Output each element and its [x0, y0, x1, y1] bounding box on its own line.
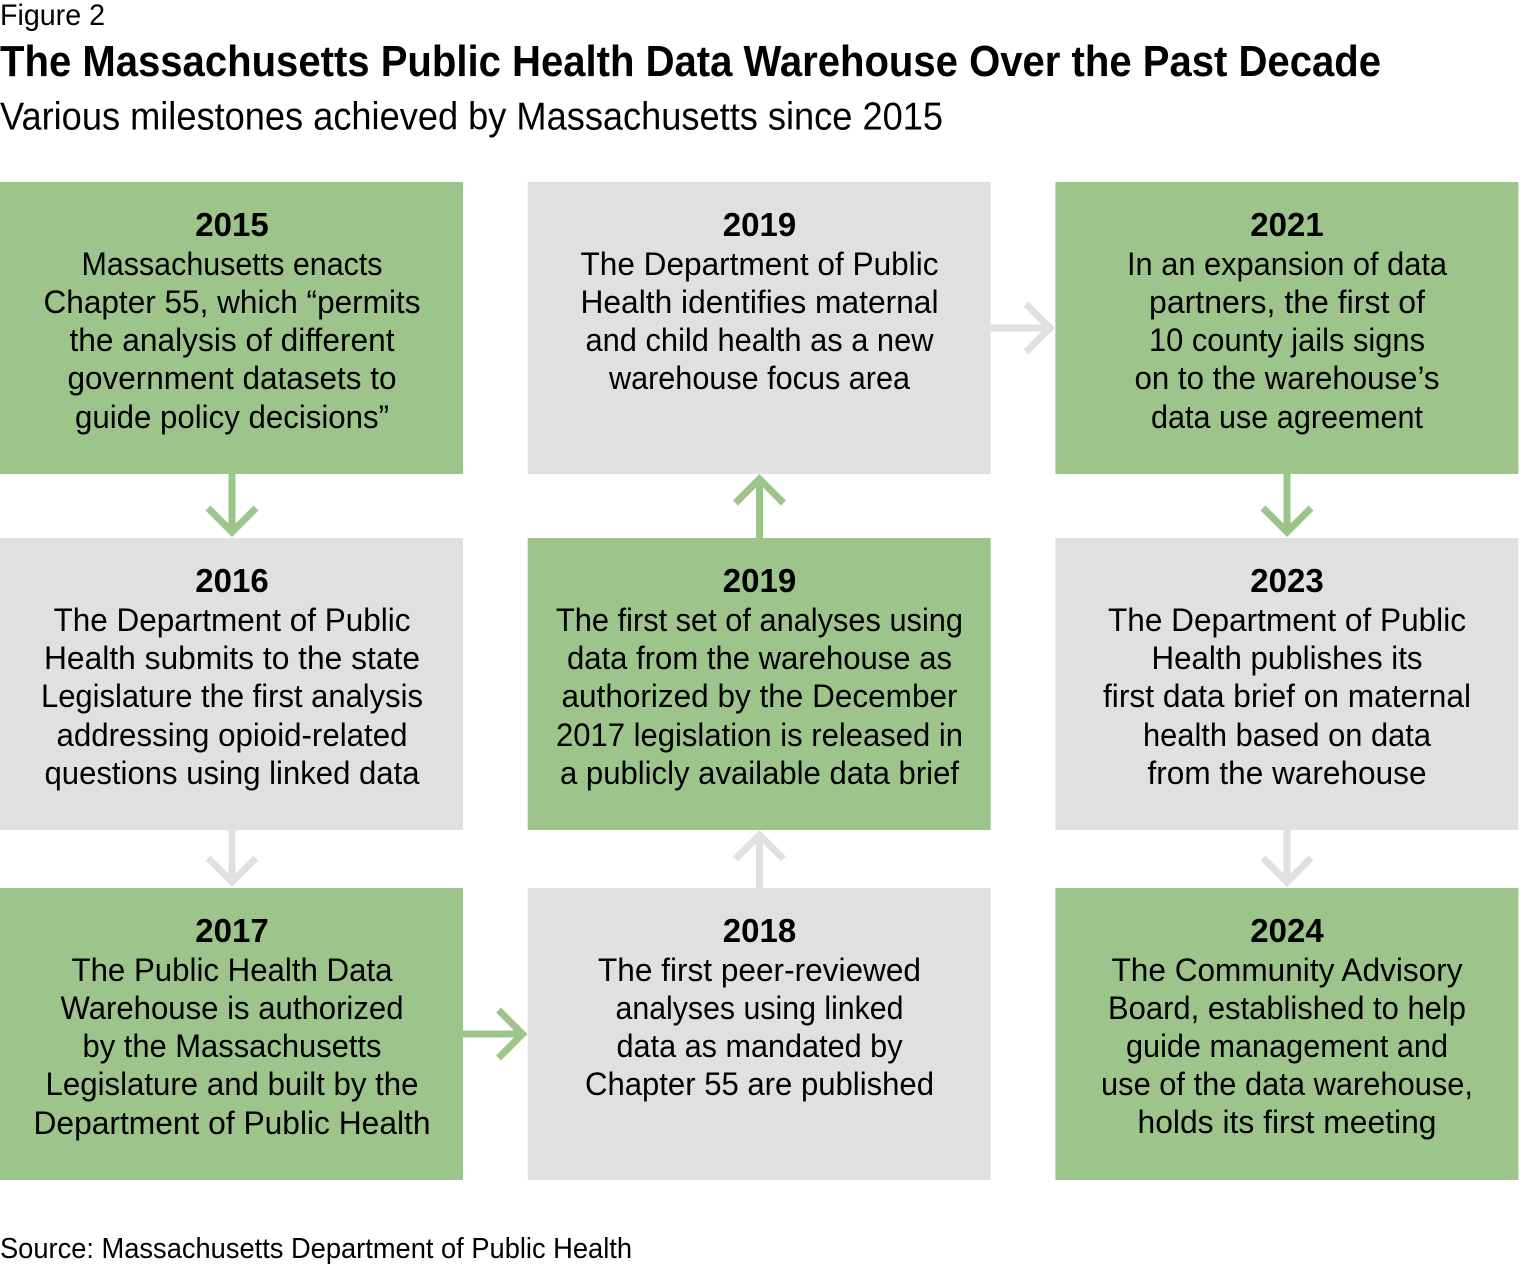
panel: 2024: The Community Advisory [1112, 952, 1462, 988]
panel: 2017: Department of Public Health [34, 1105, 430, 1141]
arrow: 2023 to 2024 [1263, 830, 1311, 882]
arrow: 2019 analyses to 2019 focus area [736, 479, 784, 538]
panel: 2017: by the Massachusetts [82, 1028, 382, 1064]
panel: 2021: In an expansion of data [1127, 246, 1447, 282]
panel: 2024 [1055, 888, 1518, 1180]
panel: 2023: Health publishes its [1152, 640, 1422, 676]
arrow: 2018 to 2019 analyses [736, 835, 784, 888]
panel: 2018 [528, 888, 991, 1180]
panel: 2019 analyses: data from the warehouse as [567, 640, 952, 676]
panel: 2015 [0, 182, 463, 474]
subtitle: Various milestones achieved by Massachusetts since 2015 [0, 96, 943, 138]
panel: 2019 focus area: 2019 [723, 206, 796, 243]
panel: 2023 [1055, 538, 1518, 830]
panel: 2023: health based on data [1143, 717, 1431, 753]
panel: 2021: 10 county jails signs [1149, 322, 1425, 358]
panel: 2021: data use agreement [1151, 399, 1423, 435]
panel: 2019 focus area [528, 182, 991, 474]
panel: 2016: Legislature the first analysis [41, 678, 423, 714]
panel: 2018: 2018 [723, 912, 796, 949]
panel: 2018: data as mandated by [616, 1028, 902, 1064]
panel: 2019 analyses: 2019 [723, 562, 796, 599]
panel: 2019 analyses: a publicly available data brief [560, 755, 959, 791]
panel: 2023: from the warehouse [1148, 755, 1426, 791]
arrow: 2019 focus area to 2021 [991, 304, 1050, 352]
panel: 2017: The Public Health Data [72, 952, 393, 988]
arrow: 2016 to 2017 [208, 830, 256, 882]
arrow: 2021 to 2023 [1263, 474, 1311, 532]
panel: 2015: guide policy decisions” [75, 399, 389, 435]
panel: 2023: 2023 [1250, 562, 1324, 599]
panel: 2016 [0, 538, 463, 830]
panel: 2024: use of the data warehouse, [1101, 1066, 1473, 1102]
panel: 2015: Massachusetts enacts [82, 246, 382, 282]
panel: 2015: government datasets to [68, 360, 396, 396]
panel: 2019 focus area: Health identifies maternal [580, 284, 938, 320]
panel: 2024: guide management and [1126, 1028, 1448, 1064]
panel: 2023: The Department of Public [1108, 602, 1466, 638]
panel: 2019 focus area: The Department of Public [580, 246, 938, 282]
panel: 2018: Chapter 55 are published [585, 1066, 934, 1102]
title: The Massachusetts Public Health Data Warehouse Over the Past Decade [0, 37, 1381, 86]
panel: 2018: The first peer-reviewed [598, 952, 921, 988]
panel: 2023: first data brief on maternal [1103, 678, 1471, 714]
panel: 2017: 2017 [195, 912, 269, 949]
arrow: 2017 to 2018 [463, 1010, 522, 1058]
panel: 2015: the analysis of different [70, 322, 395, 358]
panel: 2016: 2016 [195, 562, 269, 599]
panel: 2021: 2021 [1250, 206, 1324, 243]
panel: 2017: Legislature and built by the [46, 1066, 418, 1102]
panel: 2021: on to the warehouse’s [1134, 360, 1440, 396]
panel: 2024: 2024 [1250, 912, 1324, 949]
panel: 2019 analyses: 2017 legislation is released in [556, 717, 963, 753]
panel: 2021: partners, the first of [1149, 284, 1425, 320]
panel: 2016: questions using linked data [44, 755, 420, 791]
panel: 2019 analyses: authorized by the December [562, 678, 958, 714]
panel: 2019 analyses [528, 538, 991, 830]
panel: 2021 [1055, 182, 1518, 474]
panel: 2016: Health submits to the state [44, 640, 420, 676]
panel: 2017 [0, 888, 463, 1180]
panel: 2019 focus area: warehouse focus area [608, 360, 910, 396]
panel: 2024: Board, established to help [1108, 990, 1466, 1026]
panel: 2019 focus area: and child health as a new [586, 322, 934, 358]
panel: 2015: Chapter 55, which “permits [44, 284, 420, 320]
panel: 2024: holds its first meeting [1138, 1104, 1436, 1140]
panel: 2016: addressing opioid-related [56, 717, 408, 753]
panel: 2015: 2015 [195, 206, 269, 243]
arrow: 2015 to 2016 [208, 474, 256, 532]
panel: 2019 analyses: The first set of analyses using [556, 602, 963, 638]
source note: Source: Massachusetts Department of Public Health [0, 1233, 632, 1265]
panel: 2018: analyses using linked [616, 990, 904, 1026]
panel: 2017: Warehouse is authorized [60, 990, 404, 1026]
panel: 2016: The Department of Public [54, 602, 410, 638]
